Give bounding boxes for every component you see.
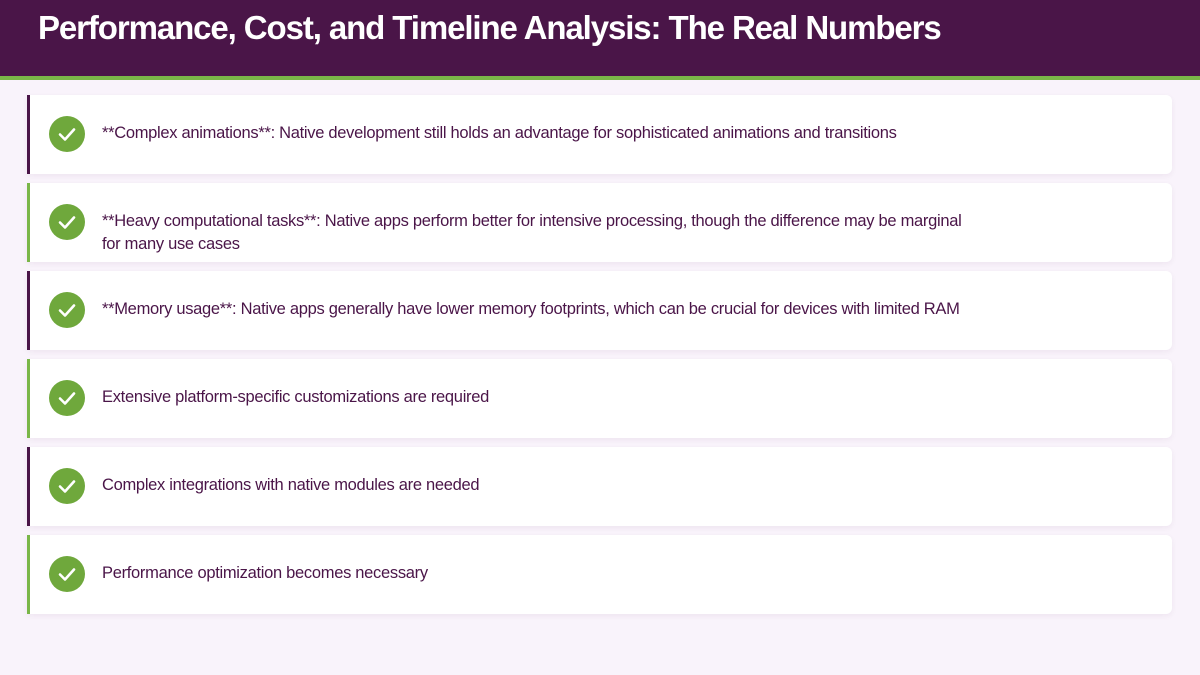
title: Performance, Cost, and Timeline Analysis: The Real Numbers — [38, 9, 941, 46]
text: Complex integrations with native modules are needed — [102, 476, 479, 494]
text: Extensive platform-specific customizations are required — [102, 388, 489, 406]
icon: check — [49, 556, 85, 592]
card: performance optimization — [27, 535, 1172, 614]
card: native modules — [27, 447, 1172, 526]
icon: check — [49, 380, 85, 416]
icon: check — [49, 292, 85, 328]
header — [0, 0, 1200, 80]
icon: check — [49, 468, 85, 504]
card: memory usage — [27, 271, 1172, 350]
text: **Memory usage**: Native apps generally have lower memory footprints, which can be crucial for devices with limited RAM — [102, 300, 960, 318]
card: complex animations — [27, 95, 1172, 174]
text: Performance optimization becomes necessary — [102, 564, 428, 582]
card: platform customizations — [27, 359, 1172, 438]
text: **Heavy computational tasks**: Native apps perform better for intensive processing, though the difference may be marginal for many use cases — [102, 212, 961, 253]
icon: check — [49, 204, 85, 240]
card: heavy computational tasks — [27, 183, 1172, 262]
icon: check — [49, 116, 85, 152]
text: **Complex animations**: Native development still holds an advantage for sophisticated animations and transitions — [102, 124, 897, 142]
